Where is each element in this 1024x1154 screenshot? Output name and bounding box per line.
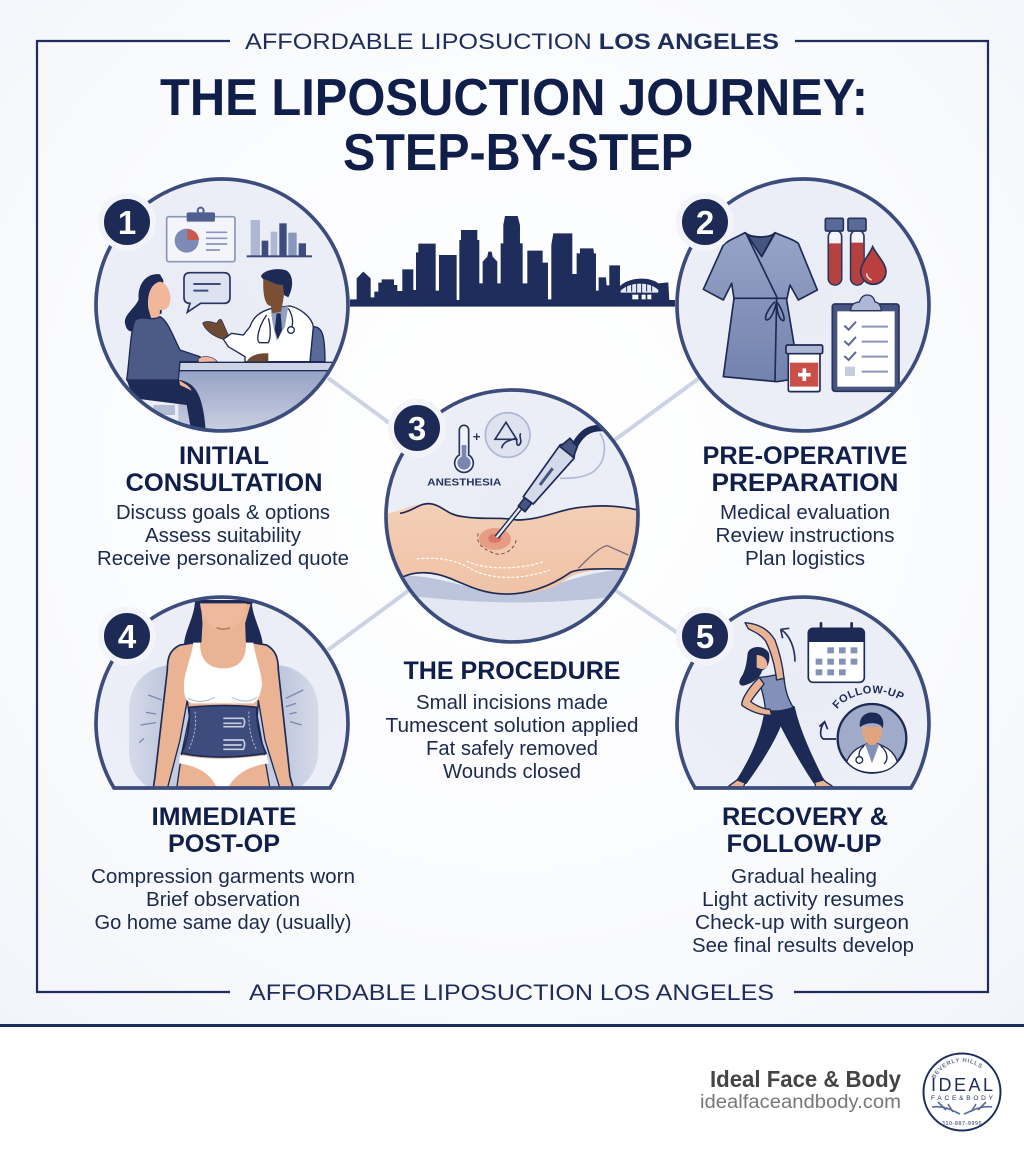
step 5 illustration: recovery [675,595,931,790]
brand name: Ideal Face & Body [710,1066,901,1092]
logo: FACE&BODY [931,1095,994,1102]
icon: doctor portrait [838,704,906,773]
step 4 text: Go home same day (usually) [94,912,352,934]
step 3 heading: THE PROCEDURE [404,657,620,685]
step 2 heading [702,442,908,497]
arrow up [781,628,795,662]
step 2 text: Medical evaluation [720,502,890,524]
step 3 illustration: procedure [383,390,643,647]
step 4 illustration: post-op [96,597,348,795]
step 3 text: Tumescent solution applied [386,715,638,737]
step 3 text [386,692,638,783]
step 5 text: See final results develop [692,935,914,957]
step 1 heading [126,442,322,497]
arrow to doctor [819,722,836,739]
badge 3: 3 [408,410,426,447]
icon: medicine jar [786,345,823,392]
badge 4: 4 [118,618,137,655]
underlying surface [403,570,624,602]
exercising figure [728,623,833,787]
step 3 text: Fat safely removed [426,738,598,760]
badge 4 [101,610,153,662]
badge 2: 2 [696,204,714,241]
step 1 text: Receive personalized quote [97,548,349,570]
city skyline [350,216,675,307]
step 1 text [97,502,349,570]
step 4 text [91,866,355,934]
step 1 text: Discuss goals & options [116,502,330,524]
soft halo [129,665,318,795]
logo: BEVERLY HILLS [931,1058,982,1079]
brand url: idealfaceandbody.com [700,1092,901,1113]
patient figure [125,274,217,433]
step 2 illustration: preparation [677,179,929,431]
doctor figure [203,269,313,362]
logo: 310-887-9995 [942,1121,982,1127]
top banner text: AFFORDABLE LIPOSUCTION LOS ANGELES [245,29,779,54]
footer [0,1024,1024,1132]
step 5 text: Gradual healing [731,866,877,888]
step 1 heading: INITIAL [179,442,269,470]
icon: clipboard with pie chart [167,208,235,262]
icon: bar chart [247,220,312,257]
icon: solution drop [485,413,530,457]
badge 2 [679,196,731,248]
icon: checklist clipboard [832,295,899,391]
logo [922,1052,1002,1132]
title: THE LIPOSUCTION JOURNEY: [160,69,868,127]
outer frame [37,41,988,992]
icon: thermometer [455,425,480,472]
title [160,69,868,182]
step 4 text: Brief observation [146,889,300,911]
badge 1: 1 [118,204,136,241]
step 1 text: Assess suitability [145,525,301,547]
step 2 text [716,502,894,570]
figure [153,600,293,789]
step 2 heading: PREPARATION [712,469,898,497]
step 1 illustration: consultation [96,179,348,434]
icon: surgical robe [703,233,817,382]
step 4 heading: IMMEDIATE [152,803,296,831]
step 5 heading: RECOVERY & [722,803,888,831]
bottom banner text: AFFORDABLE LIPOSUCTION LOS ANGELES [249,980,774,1005]
step 5 text: Check-up with surgeon [695,912,909,934]
icon: speech bubble [184,273,230,312]
step 4 heading: POST-OP [168,830,280,858]
icon: cannula [497,428,610,537]
step 4 heading [152,803,296,858]
anesthesia label: ANESTHESIA [427,477,501,488]
step 2 text: Review instructions [716,525,894,547]
badge 5 [679,610,731,662]
step 2 heading: PRE-OPERATIVE [702,442,908,470]
desk [174,362,335,434]
title: STEP-BY-STEP [343,124,693,182]
step 5 heading: FOLLOW-UP [726,830,882,858]
step 5 text [692,866,914,957]
follow-up label: FOLLOW-UP [832,685,904,709]
badge 1 [101,196,153,248]
step 3 text: Wounds closed [443,761,581,783]
step 5 text: Light activity resumes [702,889,904,911]
step 3 text: Small incisions made [416,692,608,714]
step 4 text: Compression garments worn [91,866,355,888]
icon: calendar [808,623,864,682]
icon: blood vials [825,218,886,285]
step 1 heading: CONSULTATION [126,469,322,497]
badge 3 [391,402,443,454]
connector lines [328,376,702,650]
logo: IDEAL [931,1075,993,1095]
body skin [383,504,640,594]
step 5 heading [722,803,888,858]
badge 5: 5 [696,618,714,655]
step 2 text: Plan logistics [745,548,865,570]
chair [310,327,325,362]
